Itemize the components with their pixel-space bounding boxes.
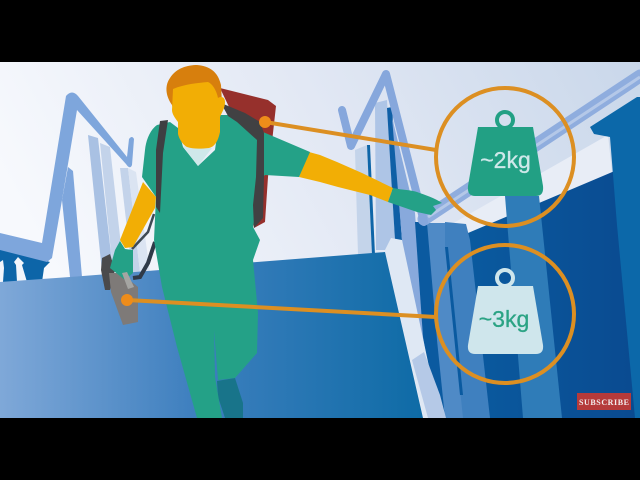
scrubs bbox=[142, 115, 310, 418]
staircase floor bbox=[0, 252, 423, 418]
bag handle bbox=[122, 272, 134, 289]
label: 2kg: ~2kg bbox=[480, 147, 531, 173]
foot bbox=[217, 378, 243, 418]
backpack bbox=[220, 88, 276, 228]
bag bbox=[101, 254, 138, 325]
connector: backpack to 2kg bbox=[259, 116, 436, 150]
shoulder strap bbox=[132, 214, 154, 249]
left hand bbox=[110, 241, 133, 280]
left arm bbox=[120, 182, 156, 248]
icon: 2kg weight bbox=[468, 112, 543, 196]
scene background bbox=[0, 62, 640, 418]
right hand bbox=[388, 188, 442, 215]
right arm bbox=[299, 152, 393, 202]
callout: 2kg weight bbox=[436, 88, 574, 226]
right backpack strap bbox=[221, 103, 264, 228]
left staircase railing bbox=[0, 92, 150, 284]
icon: 3kg weight bbox=[468, 270, 543, 354]
subscribe badge: SUBSCRIBE bbox=[579, 398, 629, 407]
right staircase railing and columns bbox=[342, 74, 640, 418]
hair bbox=[166, 65, 222, 112]
face bbox=[172, 82, 225, 149]
left backpack strap bbox=[156, 120, 168, 213]
right wall under handrail bbox=[450, 135, 612, 234]
callout: 3kg weight bbox=[436, 245, 574, 383]
subscribe badge bbox=[577, 393, 631, 410]
label: 3kg: ~3kg bbox=[479, 306, 529, 332]
person bbox=[101, 65, 442, 418]
undershirt bbox=[183, 146, 212, 166]
connector: bag to 3kg bbox=[121, 294, 436, 317]
